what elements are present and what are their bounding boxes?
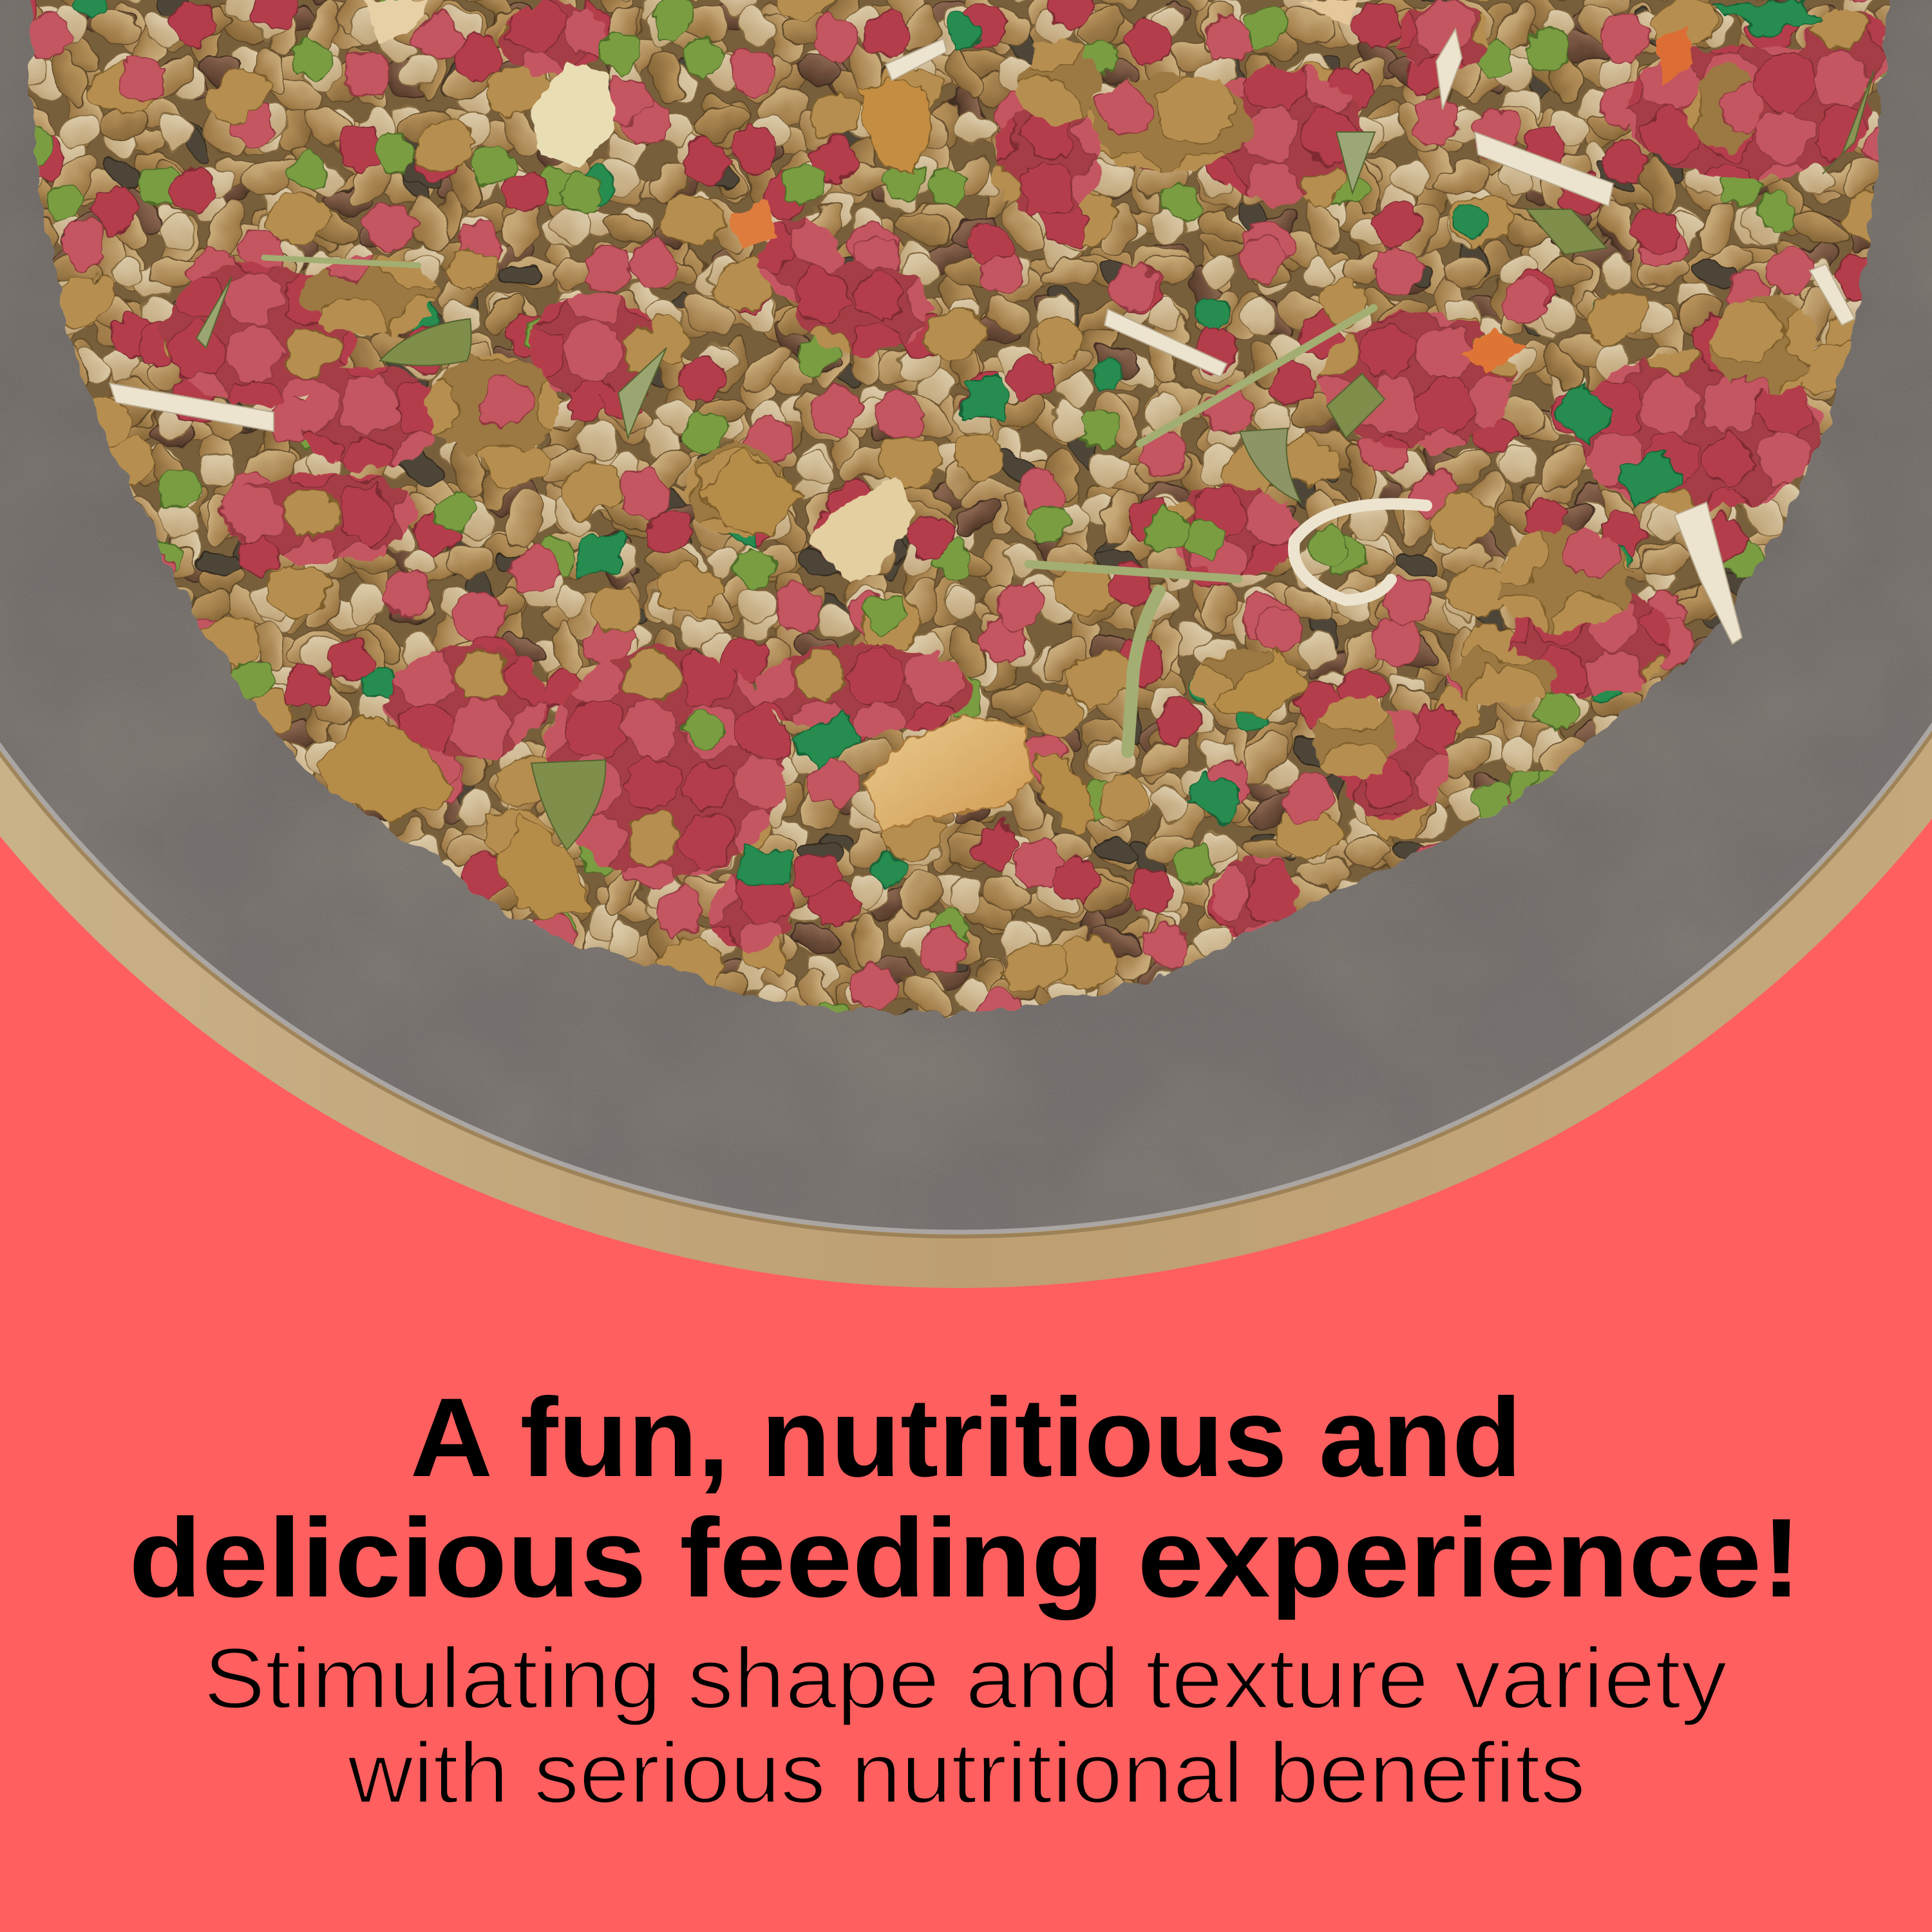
bright green pellets [48,0,1823,891]
subheading [204,1631,1727,1821]
subheading line 1: Stimulating shape and texture variety [204,1631,1727,1727]
gold kibble blobs [322,80,1307,921]
green herb stems [264,258,1374,752]
subheading line 2: with serious nutritional benefits [347,1725,1586,1821]
headline [129,1374,1801,1620]
headline line 1: A fun, nutritious and [410,1374,1522,1500]
plate [0,0,1932,1288]
pale coconut strips [109,29,1855,644]
golden kibble clusters [302,42,1814,781]
dried leaves [196,71,1874,850]
plate surface [0,0,1932,1236]
candied fruit chunks [364,0,1694,831]
warm shading over the mix [0,0,1932,1043]
plate inner edge highlight [0,0,1932,1232]
coconut curl [1294,504,1426,600]
plate rim [0,0,1932,1288]
headline line 2: delicious feeding experience! [129,1495,1801,1620]
seed pile [0,0,1932,1043]
red and pink pellet clusters [162,0,1890,953]
